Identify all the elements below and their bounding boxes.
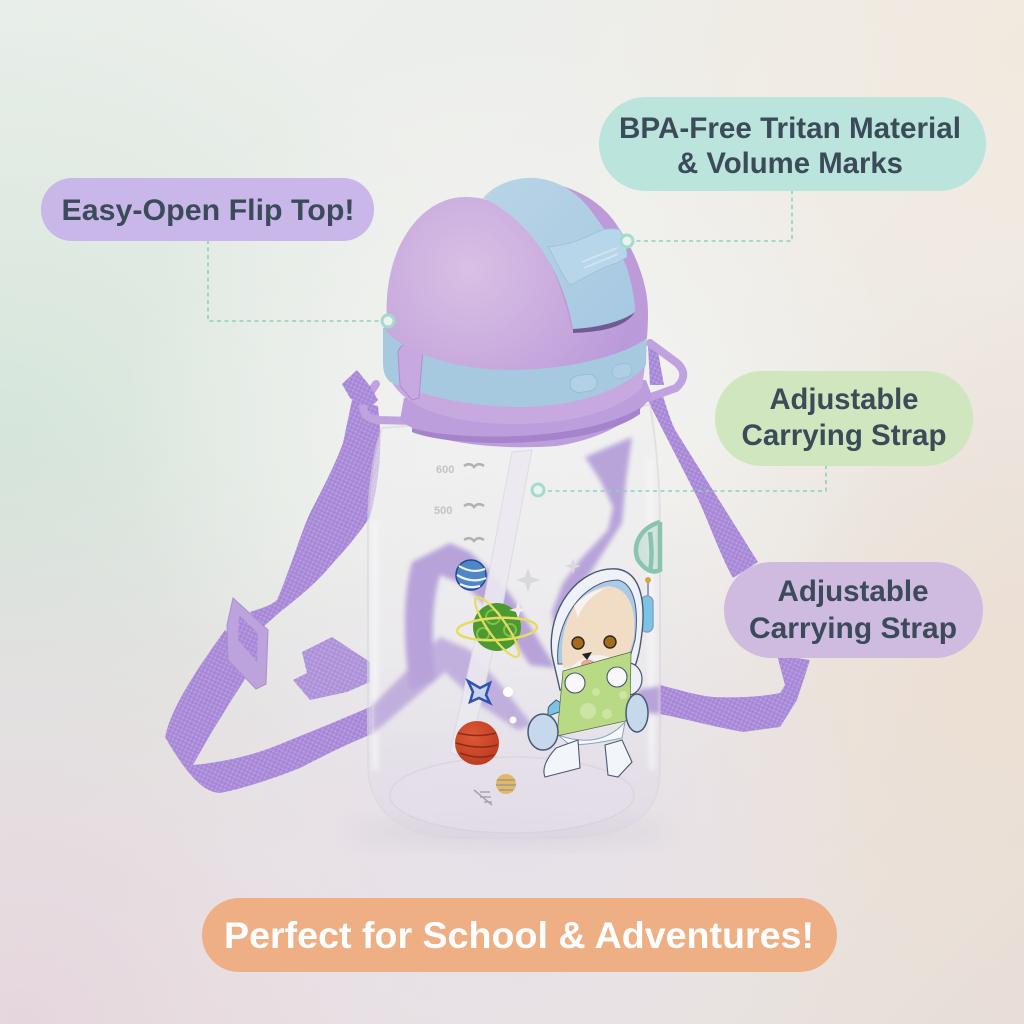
volume marks: 600 — [436, 464, 454, 476]
icon: green ringed planet — [456, 592, 538, 662]
lid lower purple rim — [387, 358, 646, 424]
paws — [565, 673, 585, 693]
callout: adjustable carrying strap purple: Adjustable — [778, 575, 928, 608]
lid dome back — [520, 180, 648, 340]
volume marks — [434, 464, 484, 541]
antenna — [647, 582, 649, 596]
icon: strap buckle — [227, 598, 268, 689]
face — [562, 586, 634, 668]
band pills — [569, 362, 633, 394]
callout: adjustable carrying strap green: Adjustable — [770, 383, 918, 416]
carrying strap — [165, 345, 810, 793]
icon: sparkle stars — [503, 558, 581, 724]
strap: left tab around handle — [342, 370, 378, 406]
bottom of bottle — [390, 757, 634, 833]
bottle — [368, 405, 660, 838]
callout: adjustable carrying strap purple — [724, 562, 983, 658]
banner: perfect for school — [202, 898, 837, 972]
callout: easy-open flip top: Easy-Open Flip Top! — [62, 194, 354, 227]
callout: adjustable carrying strap purple: Carrying Strap — [749, 612, 957, 645]
strap: upper left band — [250, 400, 380, 628]
icon: small planets at bottom — [474, 774, 516, 805]
icon: red planet — [455, 721, 499, 765]
band clip — [398, 342, 423, 400]
green bib — [557, 652, 631, 736]
straps seen through bottle — [372, 437, 660, 734]
strap: upper right stub — [648, 345, 664, 385]
flip cap shadow — [573, 312, 635, 333]
ground shadow — [345, 822, 675, 842]
flip cap tab ridges — [582, 248, 618, 268]
lid flange — [400, 380, 652, 447]
callout: easy-open flip top — [41, 178, 394, 327]
helmet — [551, 569, 643, 695]
icon: blue star — [468, 681, 490, 703]
callout: BPA-free tritan material: & Volume Marks — [677, 147, 903, 180]
callout: adjustable carrying strap green: Carrying Strap — [742, 419, 946, 452]
bottle body — [368, 405, 660, 838]
lid dome — [384, 197, 647, 370]
strap: lower right band — [660, 655, 810, 732]
icon: astronaut bear — [528, 569, 653, 777]
strap: back left fold — [293, 637, 370, 700]
lid flange shade — [412, 408, 640, 443]
strap: lower left loop — [165, 630, 372, 793]
volume marks: 500 — [434, 505, 452, 517]
icon: teal planet right — [636, 522, 660, 572]
lid — [363, 178, 683, 447]
flip cap tab — [548, 229, 627, 285]
lid handles — [363, 343, 683, 421]
suit arms and legs — [548, 700, 570, 716]
boots discs — [528, 714, 558, 750]
bottle edge highlight — [375, 460, 652, 770]
icon: blue planet — [456, 560, 486, 590]
callout: adjustable carrying strap green — [532, 371, 973, 496]
flip cap — [483, 178, 635, 329]
lid blue band — [383, 325, 647, 407]
strap: right band — [648, 396, 758, 578]
banner: perfect for school: Perfect for School & Adventures! — [224, 915, 814, 956]
callout: BPA-free tritan material — [599, 97, 986, 247]
straw — [450, 450, 532, 760]
callout: BPA-free tritan material: BPA-Free Tritan Material — [619, 112, 961, 145]
